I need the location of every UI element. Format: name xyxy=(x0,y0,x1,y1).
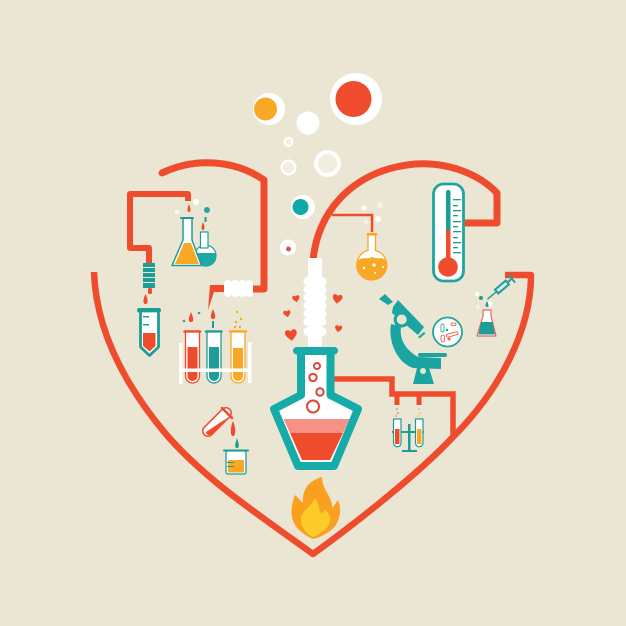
left pipe xyxy=(130,194,188,294)
orange tube xyxy=(230,332,246,383)
orange round flask xyxy=(357,202,387,280)
teal coil xyxy=(143,263,155,288)
conical and round flasks xyxy=(172,199,216,267)
top-left arc pipe xyxy=(162,163,264,310)
heart outline xyxy=(94,272,531,554)
hanging test tube xyxy=(137,294,161,356)
white coil xyxy=(224,280,253,297)
pipe tip xyxy=(208,285,224,310)
stand with two tubes xyxy=(392,408,424,452)
thermometer xyxy=(434,184,464,281)
beaker xyxy=(224,450,248,474)
test tube rack xyxy=(179,309,252,384)
right arc pipe xyxy=(313,164,497,262)
red tube xyxy=(184,332,200,383)
bacteria dish xyxy=(433,318,462,346)
main tube with white coil xyxy=(304,258,326,348)
teal tube xyxy=(206,332,222,383)
hearts xyxy=(283,294,343,342)
bubbles xyxy=(253,73,382,256)
main flask xyxy=(274,347,358,466)
tilted test tube xyxy=(206,408,239,448)
flame xyxy=(291,477,340,539)
lower right pipe xyxy=(332,379,453,436)
microscope xyxy=(379,294,447,384)
syringe and conical flask xyxy=(475,274,516,336)
